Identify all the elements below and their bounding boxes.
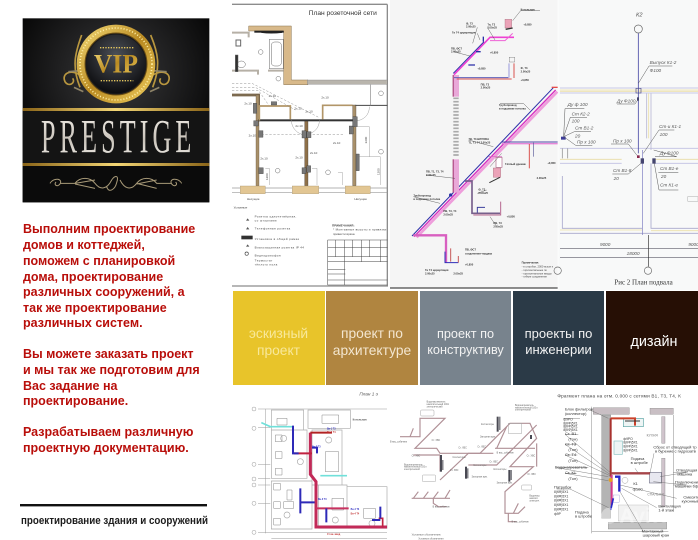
name band xyxy=(23,110,209,165)
right callouts: ф9РО xyxy=(623,437,633,441)
dimension labels: 2х.10 xyxy=(260,156,268,160)
plan title: План розеточной сети xyxy=(309,9,377,17)
pipe labels: Тёплый дренаж xyxy=(505,162,526,166)
left callouts: Блок фильтров xyxy=(565,406,593,411)
axis lines xyxy=(252,407,387,538)
dimension labels: Несущие xyxy=(247,197,260,201)
vertical riser xyxy=(453,75,459,193)
pipe labels: +0,850 xyxy=(547,161,556,165)
wiring runs xyxy=(232,83,344,134)
notes: электрический xyxy=(404,468,420,471)
intro text xyxy=(23,222,203,455)
drawing: riser isometric scheme xyxy=(390,0,558,289)
pipe labels: в подшивке потолка xyxy=(413,198,441,201)
logo: VIP Prestige xyxy=(23,18,209,202)
notes: накопительный 100л xyxy=(404,466,427,469)
pipe labels: 2.00х25 xyxy=(481,85,491,89)
left callouts: 8(КФ)5Х1 xyxy=(563,428,578,432)
pipe labels: Вн-1 Т3 xyxy=(327,429,336,431)
pipe labels: ПВ, Т3 xyxy=(481,82,490,86)
gold stripes xyxy=(23,108,209,166)
blue pipes xyxy=(293,426,380,522)
pipe labels: ПВ, Т3, Т4 xyxy=(443,209,457,213)
pipe labels: 2.00х25 xyxy=(426,173,436,177)
pipe labels: Ти Т4 циркуляция xyxy=(452,30,476,34)
fittings xyxy=(561,97,656,164)
left callouts: ф9Р xyxy=(554,512,562,516)
pipe labels: - гибкие соединения xyxy=(522,275,547,279)
right callouts: Отводящая xyxy=(676,468,697,473)
paragraph 1: домов и коттеджей, xyxy=(23,238,145,252)
paragraph 1: Выполним проектирование xyxy=(23,222,195,236)
dimension labels: 2х.10 xyxy=(295,124,303,128)
legend: Телефонная розетка xyxy=(255,226,291,230)
water heater middle xyxy=(449,157,502,197)
tile: structure: проект по xyxy=(437,327,494,341)
pipe labels: ПВ, ФСТ xyxy=(451,46,462,50)
legend: Термостат xyxy=(255,259,273,263)
axis and riser xyxy=(554,25,652,274)
title block xyxy=(328,240,387,285)
notes: Коллекторы xyxy=(493,469,507,471)
right callouts: машинки бф xyxy=(675,484,698,489)
notes: накопительный 100л xyxy=(515,406,538,409)
left callouts: (Тон) xyxy=(568,458,578,463)
PRESTIGE lettering: PRESTIGE xyxy=(41,112,191,164)
paragraph 1: так же проектирование xyxy=(23,301,167,315)
right callouts: СПАЛЬНЯ xyxy=(647,493,664,497)
notes: В вас_собачник xyxy=(497,452,515,454)
red pipes xyxy=(294,433,387,527)
red riser pipes xyxy=(609,418,650,510)
pipe labels: +0,850 xyxy=(507,215,515,219)
image watermark: Avito xyxy=(619,504,670,527)
tile: architecture xyxy=(326,291,418,385)
pipe labels: 2.00х25 xyxy=(425,271,435,275)
annotations: Пр х 100 xyxy=(577,140,596,145)
left callouts: Ст. Т3 xyxy=(565,441,577,446)
left callouts: 8(КФ)5Х1 xyxy=(554,503,568,507)
pipe labels: 2.00х25 xyxy=(487,26,497,30)
dimension labels: 2х.10 xyxy=(305,109,313,113)
right callouts: ф100 xyxy=(633,486,643,491)
pipe labels: Ти Т4 циркуляция xyxy=(425,268,449,272)
right callouts: 8(КФ)5Х1 xyxy=(623,440,638,444)
pipe labels: Ф, Т3 xyxy=(521,66,528,70)
drawing: socket network plan xyxy=(232,4,387,287)
dimension labels: 2х.10 xyxy=(249,133,256,137)
service tiles xyxy=(233,291,698,385)
pipe labels: Котельная xyxy=(521,7,535,11)
annotations: Ду Ф100 xyxy=(659,150,679,155)
annotations: 100 xyxy=(572,119,580,124)
right callouts: Сброс от отводящей тр xyxy=(653,444,697,449)
annotations: 20 xyxy=(613,176,619,181)
annotations: 100 xyxy=(660,132,668,137)
bottom border xyxy=(390,287,558,289)
dimension lines xyxy=(560,248,698,257)
left callouts xyxy=(554,406,593,518)
left callouts: 8(КФ)5Х1 xyxy=(554,499,568,503)
annotations: Ст К2-2 xyxy=(572,111,590,116)
drawing: isometric plumbing xyxy=(390,402,541,540)
tile: structure: конструктиву xyxy=(427,343,504,357)
dimension labels: 1200 xyxy=(376,168,380,175)
drawing caption: Рис 2 План подвала xyxy=(614,278,673,286)
pipe labels: в подшивке потолка xyxy=(499,107,526,110)
notes: Условные обозначения: xyxy=(412,532,441,536)
dimension labels: 2х.10 xyxy=(294,106,302,110)
water heater top xyxy=(505,19,515,62)
pipe labels: - горизонтальные вводы xyxy=(522,272,552,275)
dimension labels: 2х.10 xyxy=(310,151,318,155)
tile: engineering: проекты по xyxy=(525,326,592,341)
notes: В вас_собачник xyxy=(433,506,451,508)
dimension labels: 2х.10 xyxy=(321,95,329,99)
notes: Ст. ХВС xyxy=(432,440,440,442)
left callouts: (коллектор) xyxy=(565,411,587,416)
pipe labels: Вн-4 Т4 xyxy=(351,512,360,515)
pipe labels: Трубопровод xyxy=(413,193,431,197)
pipe labels: ПВ, Т1, Т3, Т4 xyxy=(426,170,444,174)
annotations: Ду Ф100 xyxy=(616,98,636,103)
tile: design: дизайн xyxy=(630,334,678,350)
notes: Запорная арм. xyxy=(480,437,496,439)
legend: Видеодомофон xyxy=(255,253,281,257)
pipe labels: Ф, Т3 xyxy=(466,22,473,26)
notes: Водонагреватель xyxy=(515,405,535,407)
pipe labels: ТВ, Т3 ШТРОБА xyxy=(468,137,489,141)
notes: * Монтажные высоты и привязки xyxy=(333,228,387,232)
flourish xyxy=(50,177,182,190)
annotations: К2 xyxy=(636,13,643,19)
pipe labels: +0,850 xyxy=(490,50,499,54)
legend: Розетка одночетвёрная, xyxy=(255,214,297,218)
tile: sketch project: проект xyxy=(257,343,301,358)
paragraph 3: проектную документацию. xyxy=(23,441,189,455)
left callouts: Патрубок xyxy=(554,484,572,489)
right callouts: К1 xyxy=(633,481,639,486)
notes: Коллекторы xyxy=(481,424,494,426)
pipe labels: - горизонтальные по xyxy=(522,269,547,272)
pipe labels: ПВ, Т3 xyxy=(493,221,502,225)
pipe labels: соединения чердака xyxy=(465,252,493,255)
annotations: 9000 xyxy=(600,242,611,247)
paragraph 2: Вас задание на xyxy=(23,379,118,393)
notes: Водонагреватель xyxy=(427,402,446,404)
notes: электрич. xyxy=(529,500,540,502)
footer text: проектирование здания и сооружений xyxy=(21,515,208,527)
room outlines xyxy=(271,410,387,529)
notes: Коллекторы xyxy=(473,465,487,467)
left callouts: 8(КФ)5Х1 xyxy=(554,490,568,494)
annotations xyxy=(567,13,698,256)
tile: engineering xyxy=(513,291,604,385)
right callouts: 8(КФ)5Х1 xyxy=(623,448,638,452)
paragraph 1: дома, проектирование xyxy=(23,270,163,284)
pipe labels: +0,850 xyxy=(521,78,529,82)
pipe labels: +0,850 xyxy=(477,66,486,70)
left callouts: Ст. В1 xyxy=(565,431,577,436)
right callouts: Подача xyxy=(631,456,645,461)
leaders xyxy=(564,66,678,190)
tile: structure xyxy=(420,291,511,385)
annotations: 20 xyxy=(660,174,667,179)
cyan pipes xyxy=(261,423,347,476)
notes: Ст. ХВС xyxy=(450,470,459,472)
notes: Запорная арм. xyxy=(472,477,488,479)
notes: электрический xyxy=(427,405,443,408)
collector stacks xyxy=(440,417,532,482)
notes: привести врача xyxy=(333,232,355,236)
pipe labels: Вн-2 Т3 xyxy=(312,446,321,448)
pipe routes xyxy=(400,418,537,522)
pipe labels: Ст вн. ввод xyxy=(327,534,341,536)
notes: Ст. ХВС xyxy=(412,456,420,458)
paragraph 2: и мы так же подготовим для xyxy=(23,363,200,377)
paragraph 1: различных систем. xyxy=(23,316,143,330)
walls xyxy=(232,26,387,194)
tile: design xyxy=(606,291,698,385)
left callouts: ф9РО xyxy=(563,418,573,422)
pipe labels xyxy=(312,418,367,536)
pipe labels: Котельная xyxy=(353,418,367,422)
sheet background xyxy=(558,0,698,290)
door swings xyxy=(291,107,369,135)
annotations: Ду ф 100 xyxy=(567,102,588,107)
VIP lettering: VIP xyxy=(94,49,138,79)
annotations: Ст В1-2 xyxy=(575,126,594,131)
annotations: Ст В1-8 xyxy=(613,168,632,173)
left callouts: Ст. Т4 xyxy=(565,452,577,457)
footer rule xyxy=(20,504,207,506)
notes: электрический xyxy=(515,409,531,412)
tile: sketch project: эскизный xyxy=(249,326,308,341)
right callouts: Монтажный xyxy=(642,528,663,533)
left callouts: 8(КФ)5Х1 xyxy=(554,507,568,511)
tile: architecture: проект по xyxy=(341,326,403,341)
left callouts: в штробе xyxy=(575,513,593,518)
paragraph 1: различных сооружений, а xyxy=(23,285,186,299)
tile: architecture: архитектуре xyxy=(333,343,412,358)
dimension labels xyxy=(244,94,380,201)
right callouts: Вентиляция xyxy=(658,504,681,509)
right callouts: в бурение с гидрозатв xyxy=(655,449,696,454)
main diagonal pipes xyxy=(412,87,558,237)
pipe labels: 2.00х25 xyxy=(451,49,461,53)
annotations: Ф100 xyxy=(650,68,662,73)
pipe labels: Ф, Т3 xyxy=(478,188,486,192)
notes: Ст. ХВС xyxy=(458,447,467,449)
notes: Ст. ХВС xyxy=(489,461,498,463)
logo background xyxy=(23,18,209,202)
annotations: Ст В1-е xyxy=(660,166,679,171)
laurel ornaments xyxy=(64,35,169,92)
sheet frame xyxy=(232,4,387,287)
tile: engineering: инженерии xyxy=(525,342,592,357)
drawing: floor plan 1 xyxy=(252,392,387,538)
notes: Коллекторы xyxy=(453,457,466,459)
pipe labels: 2.00х25 xyxy=(453,272,463,276)
legend: Условные xyxy=(234,206,248,210)
dimension labels: 2х.10 xyxy=(244,101,252,105)
annotations: Ст К1-е xyxy=(660,183,678,188)
pipe labels: 2.00х25 xyxy=(537,176,547,180)
right callouts: машина xyxy=(677,472,693,477)
pipe labels: Трубопровод xyxy=(499,103,517,107)
pipe labels: Вн-1 Т4 xyxy=(327,431,336,434)
pipe labels: 2.00х25 xyxy=(493,224,503,228)
pipe labels: Вн-3 Т3 xyxy=(318,499,327,501)
paragraph 2: Вы можете заказать проект xyxy=(23,347,194,361)
leader lines xyxy=(557,410,687,532)
left callouts: Ст. К1 xyxy=(565,470,577,475)
right callouts: 1-й этаж xyxy=(658,508,674,513)
drawing: plan fragment with networks xyxy=(554,394,698,538)
pipe labels: 2.00х25 xyxy=(521,70,531,74)
left callouts: Подача xyxy=(575,509,590,514)
building walls xyxy=(592,407,673,533)
annotations: Ст-и К1-1 xyxy=(659,124,682,129)
upper branch xyxy=(453,33,514,79)
pipe labels xyxy=(413,7,556,279)
dimension labels: 2х.10 xyxy=(295,156,303,160)
dimension labels: 2х.10 xyxy=(269,94,276,98)
pipe labels: Т1, Т3 Т4 2.00х25 xyxy=(468,140,491,144)
annotations: 18000 xyxy=(627,251,640,256)
pipe labels: 2.00х25 xyxy=(478,191,488,195)
left callouts: (Тон) xyxy=(568,476,578,481)
pipe labels: +0,850 xyxy=(465,263,474,267)
annotations: 20 xyxy=(574,133,581,138)
pipe labels: Примечания: xyxy=(522,260,539,264)
pipe labels: Ти, Т3 xyxy=(487,23,496,27)
notes: Водонагр. xyxy=(529,496,541,498)
notes: Водонагреватель xyxy=(404,464,424,466)
lower logo field xyxy=(23,166,209,202)
dimension labels: 2х.10 xyxy=(333,141,341,145)
pipe labels: ПВ, ФСТ xyxy=(465,248,476,252)
notes: В вас_собачник xyxy=(390,441,408,443)
pipe labels: +0,850 xyxy=(523,22,532,26)
leader labels xyxy=(413,11,540,227)
left callouts: (Тон) xyxy=(568,447,578,452)
annotations: Выпуск К1-2 xyxy=(650,60,677,65)
left callouts: (Тон) xyxy=(568,436,578,441)
dimension labels: 1200 xyxy=(265,173,269,180)
left callouts: 8(КФ)5Х1 xyxy=(563,425,578,429)
notes: Ст. ХВС xyxy=(477,446,486,448)
legend: Влагозащитная розетка IP 44 xyxy=(255,245,304,249)
wall double lines xyxy=(560,88,698,233)
dimension labels: 2200 xyxy=(364,136,368,143)
fixture tanks xyxy=(421,410,532,490)
left callouts: 8(КФ)5Х1 xyxy=(563,421,578,425)
gold ring xyxy=(77,25,155,103)
right callouts: в штробе xyxy=(631,460,649,465)
legend: Установка в общей рамке xyxy=(255,237,300,241)
left callouts: Водонагреватель xyxy=(555,464,587,469)
legend: со шторками xyxy=(255,218,277,222)
left callouts: 8(КФ)5Х1 xyxy=(554,494,568,498)
right callouts: КУХНЯ xyxy=(647,434,658,438)
notes xyxy=(332,224,387,236)
plan title: План 1 э xyxy=(359,392,379,397)
legend: тёплого пола xyxy=(255,263,278,267)
notes: ПРИМЕЧАНИЯ: xyxy=(332,224,354,228)
bathroom fixtures xyxy=(235,32,383,175)
notes: накопительный 100л xyxy=(427,403,450,406)
notes: Ст. ХВС xyxy=(527,474,536,476)
annotations: Пр х 100 xyxy=(613,138,632,143)
notes: Ст. ХВС xyxy=(527,455,535,457)
pipe labels: - в штробах, 2000 выше п xyxy=(522,265,554,269)
right callouts: шаровый кран xyxy=(643,533,669,538)
drawing: basement plan xyxy=(554,0,698,290)
tile: sketch project xyxy=(233,291,325,385)
notes: В вас_собачник xyxy=(512,522,530,524)
dimension labels: Несущие xyxy=(354,197,367,201)
pipe labels: 2.00х25 xyxy=(443,213,453,217)
paragraph 1: поможем с планировкой xyxy=(23,254,175,268)
legend xyxy=(234,206,304,267)
right callouts: 8(КФ)5Х1 xyxy=(623,444,638,448)
fragment title: Фрагмент плана на отм. 0.000 с сетями В1, Т3, Т4, К xyxy=(557,394,681,399)
pipe labels: Вн-4 Т3 xyxy=(351,508,360,511)
paragraph 3: Разрабатываем различную xyxy=(23,425,194,439)
sockets xyxy=(253,102,359,174)
right callouts xyxy=(623,434,698,538)
paragraph 2: проектирование. xyxy=(23,394,128,408)
notes xyxy=(390,402,541,540)
lower branches xyxy=(413,142,558,263)
notes: Запорная арм. xyxy=(497,482,513,484)
pipe labels: 2.00х25 xyxy=(466,25,476,29)
sheet background xyxy=(390,0,558,288)
notes: накопит. xyxy=(529,498,539,500)
